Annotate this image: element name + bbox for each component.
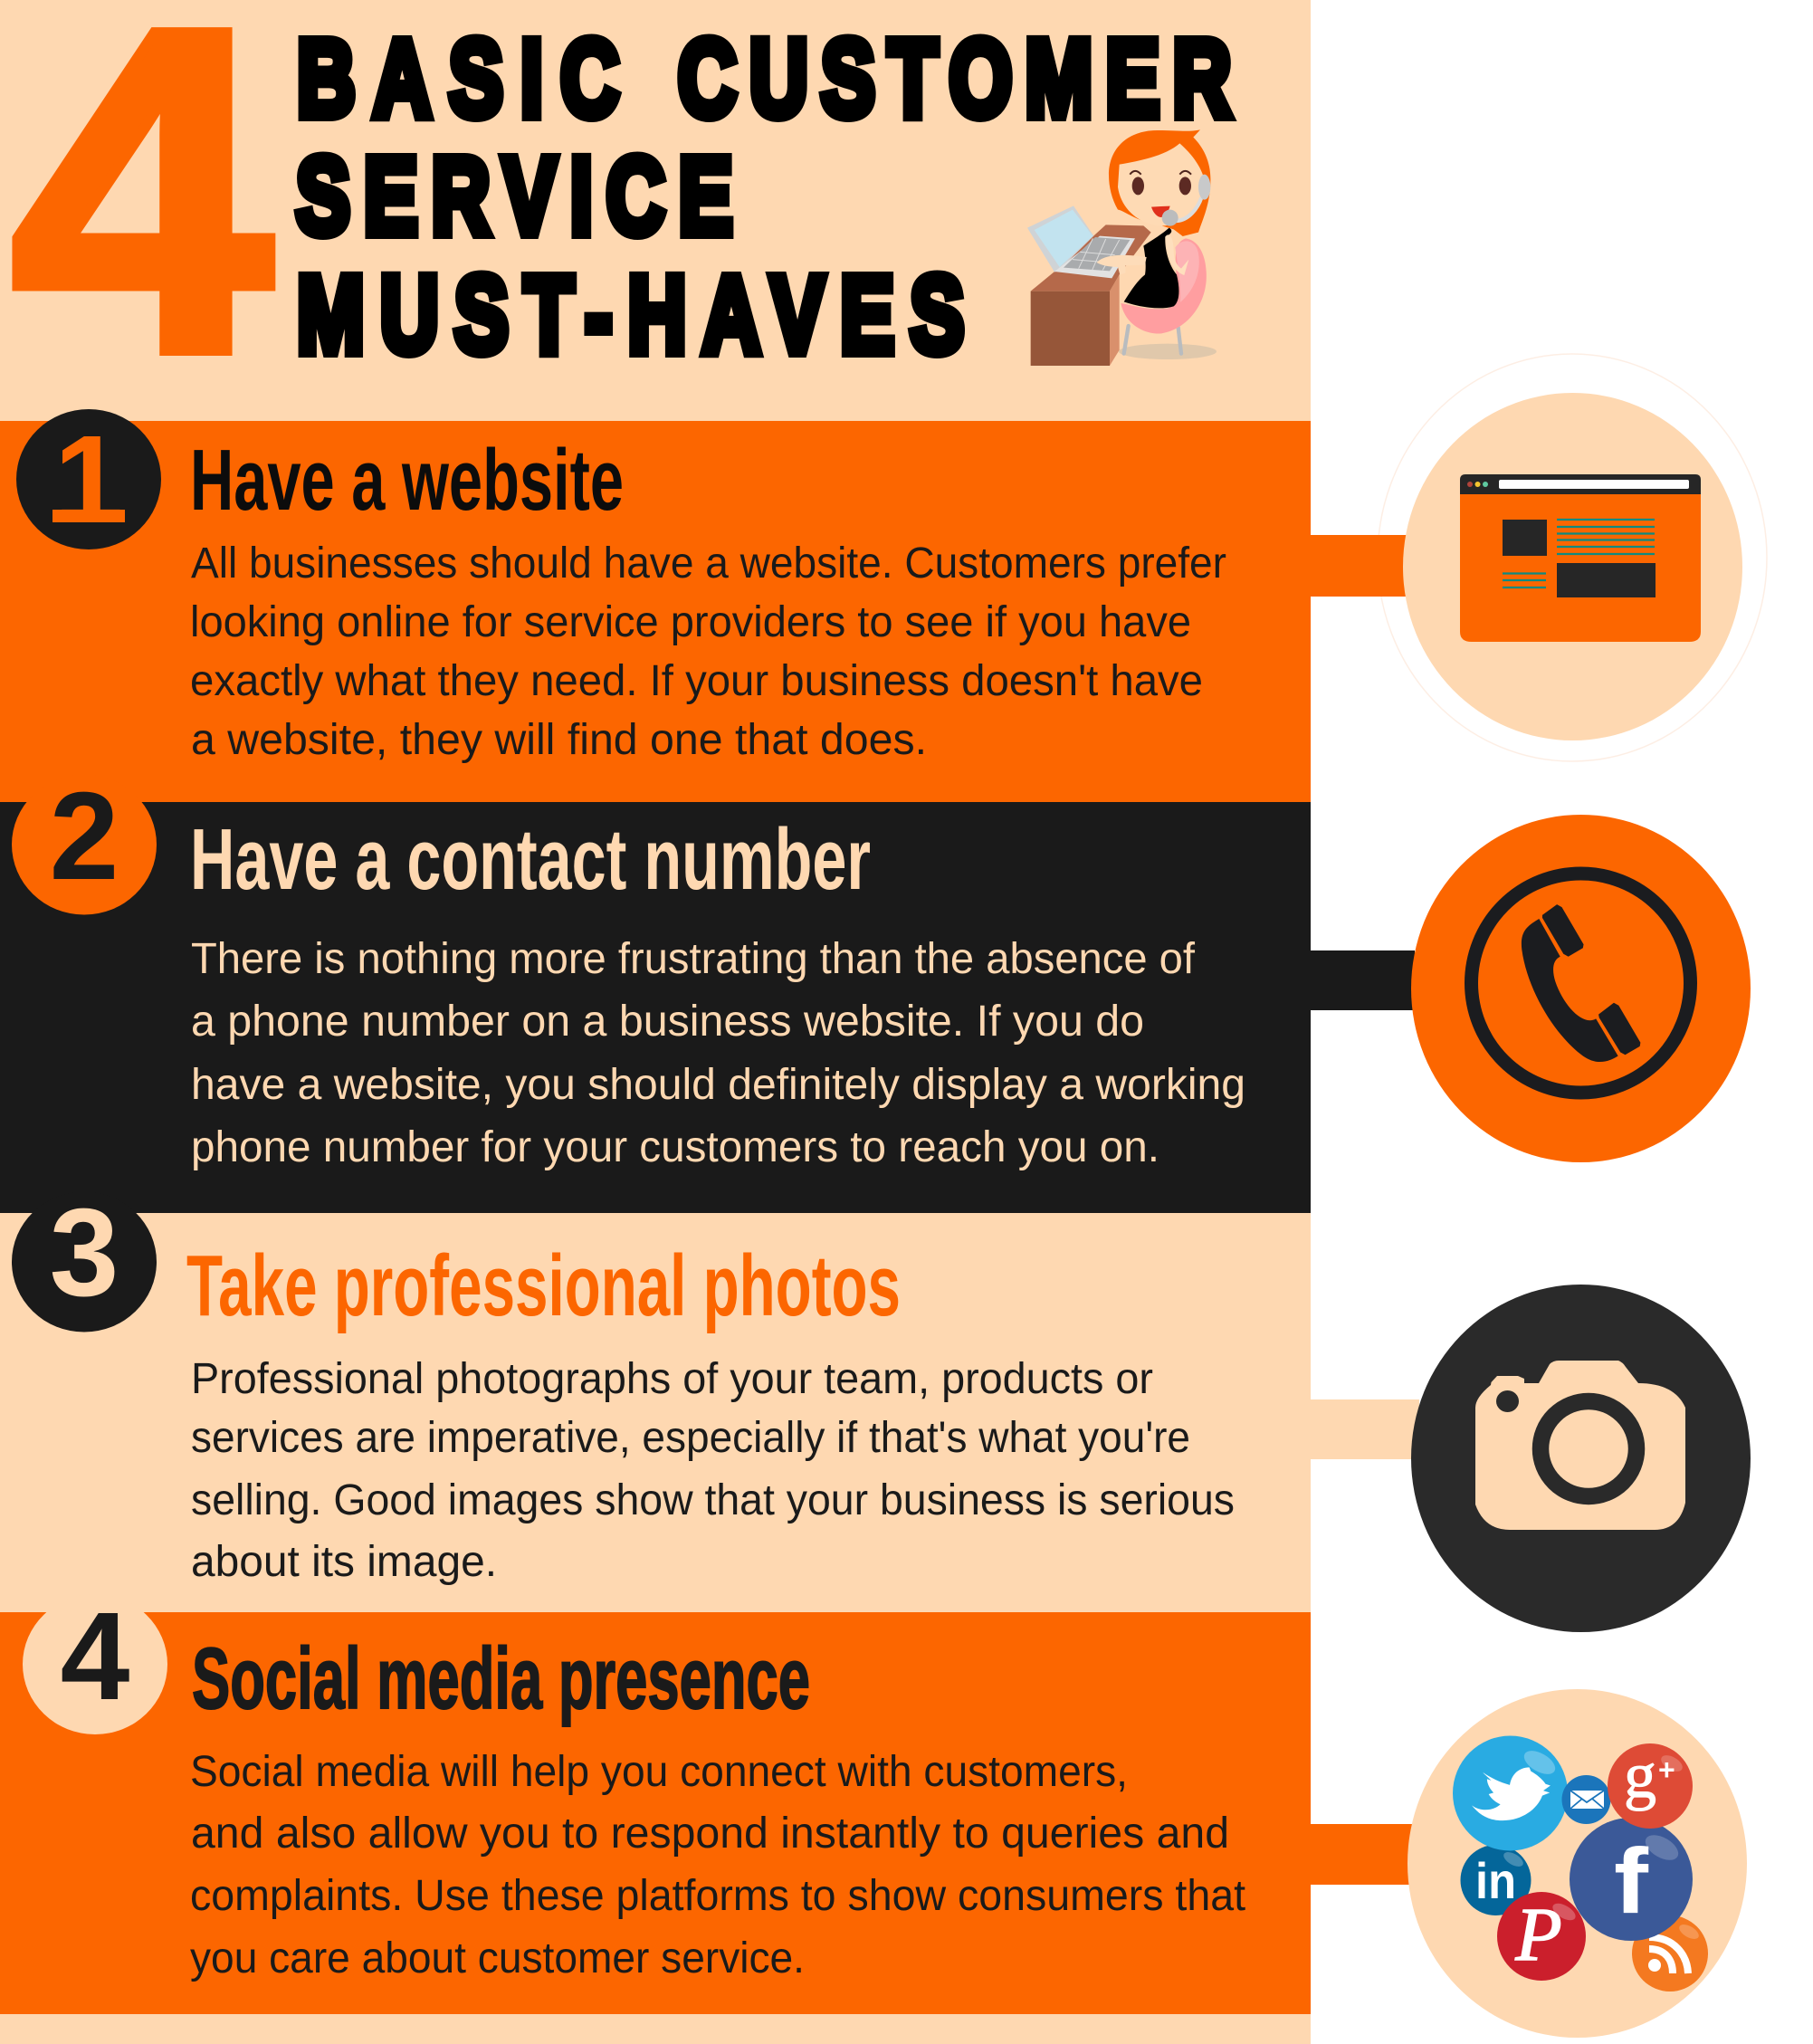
section 3 body text: services are imperative, especially if that's what you're — [191, 1414, 1190, 1462]
section 4 body text — [190, 1748, 1245, 1982]
icon: rss — [1632, 1915, 1708, 1991]
section 4 body text: and also allow you to respond instantly to queries and — [191, 1810, 1229, 1858]
section 3 body text: about its image. — [191, 1538, 497, 1586]
title: MUST-HAVES — [297, 253, 964, 376]
section 2 body text: There is nothing more frustrating than the absence of — [191, 935, 1196, 983]
connector 2 — [1311, 950, 1415, 1010]
section 1 panel — [0, 421, 1311, 802]
icon: google plus: g — [1624, 1739, 1656, 1811]
icon: linkedin: in — [1475, 1852, 1516, 1909]
illustration: woman at desk with laptop and headset — [1027, 129, 1217, 366]
icon: linkedin — [1461, 1845, 1532, 1915]
icon: facebook: f — [1614, 1829, 1649, 1933]
footer strip — [0, 2014, 1311, 2044]
section 2 body text: phone number for your customers to reach you on. — [191, 1123, 1159, 1171]
section 2 body text: a phone number on a business website. If you do — [191, 998, 1144, 1046]
section 1 body text: looking online for service providers to see if you have — [190, 598, 1191, 646]
icon: google plus — [1608, 1739, 1693, 1829]
connector 4 — [1311, 1824, 1412, 1885]
icon: camera in circle — [1411, 1285, 1751, 1632]
title: CUSTOMER — [678, 17, 1231, 139]
section 1 body text: All businesses should have a website. Customers prefer — [191, 540, 1226, 587]
title — [296, 17, 1231, 376]
number badge 2 — [12, 767, 157, 914]
number badge 4: 4 — [61, 1587, 130, 1726]
icon: website browser in circle — [1403, 393, 1742, 740]
icon: email — [1562, 1775, 1611, 1824]
section 2 heading: Have a contact number — [190, 811, 871, 908]
section 1 body text — [190, 540, 1226, 764]
section 3 body text: Professional photographs of your team, products or — [191, 1355, 1153, 1403]
icon: social media circle — [1407, 1689, 1747, 2038]
faint ring around website icon — [1378, 354, 1767, 761]
connector 3 — [1311, 1399, 1419, 1459]
section 2 body text: have a website, you should definitely display a working — [191, 1061, 1245, 1109]
section 2 panel — [0, 802, 1311, 1213]
section 3 body text — [191, 1355, 1235, 1586]
icon: twitter — [1453, 1736, 1568, 1850]
section 4 heading: Social media presence — [192, 1630, 810, 1727]
section 1 body text: exactly what they need. If your business doesn't have — [190, 657, 1203, 705]
number badge 3: 3 — [50, 1183, 119, 1323]
number badge 3 — [12, 1183, 157, 1332]
icon: pinterest: P — [1514, 1893, 1562, 1977]
icon: google plus: + — [1658, 1753, 1675, 1786]
section 3 heading: Take professional photos — [186, 1237, 901, 1334]
section 4 panel — [0, 1612, 1311, 2014]
header panel — [0, 0, 1311, 421]
section 2 body text — [191, 935, 1245, 1171]
connector 1 — [1311, 535, 1410, 597]
icon: telephone in circle — [1411, 815, 1751, 1162]
section 4 body text: Social media will help you connect with customers, — [190, 1748, 1128, 1796]
section 3 panel — [0, 1213, 1311, 1612]
title: BASIC — [297, 17, 619, 139]
icon: facebook — [1570, 1818, 1693, 1941]
number badge 2: 2 — [50, 767, 119, 906]
number badge 1 — [16, 409, 161, 549]
number badge 1: 1 — [54, 410, 123, 549]
section 4 body text: you care about customer service. — [190, 1934, 805, 1982]
section 1 heading: Have a website — [190, 432, 624, 529]
title: SERVICE — [296, 135, 732, 257]
section 4 body text: complaints. Use these platforms to show consumers that — [190, 1872, 1245, 1920]
number badge 4 — [23, 1587, 167, 1734]
icon: pinterest — [1497, 1892, 1586, 1981]
section 1 body text: a website, they will find one that does. — [191, 716, 927, 764]
section 3 body text: selling. Good images show that your business is serious — [191, 1476, 1235, 1524]
